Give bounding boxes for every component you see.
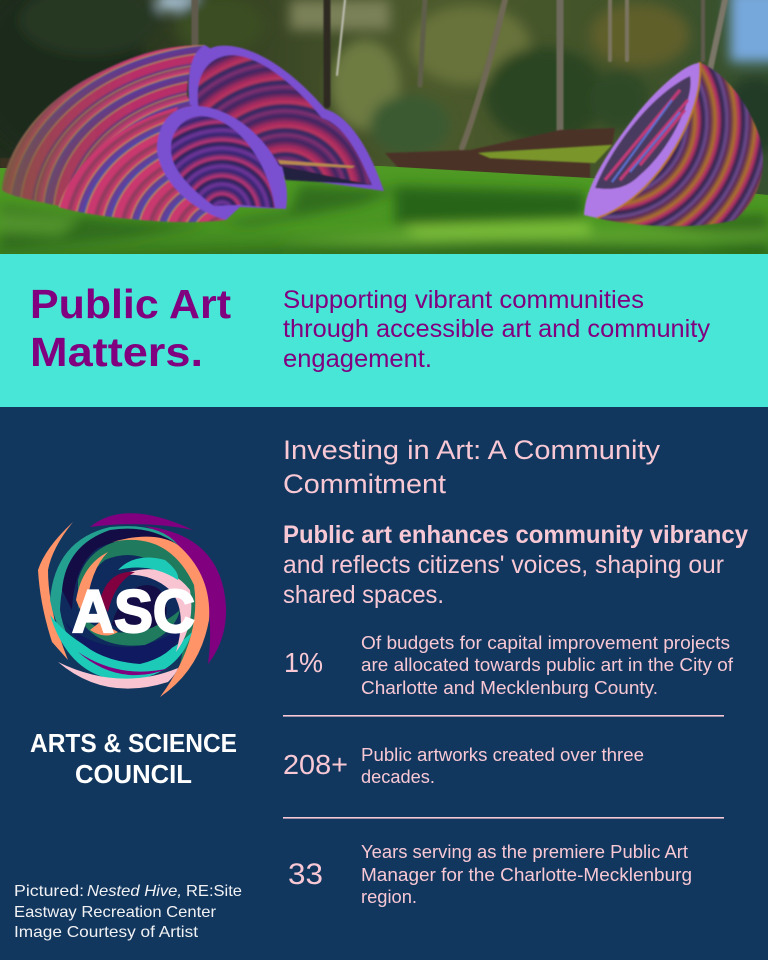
photo credit: Pictured: (14, 883, 84, 900)
stat: 33 (288, 842, 692, 907)
photo credit (14, 883, 242, 941)
photo credit: RE:Site (186, 883, 242, 900)
photo credit: Nested Hive, (87, 883, 182, 900)
sculpture: right bowl (584, 62, 763, 226)
stat: 33: region. (361, 887, 417, 907)
stat: 1%: Of budgets for capital improvement projects (361, 633, 730, 653)
organisation name: ARTS & SCIENCE (30, 728, 237, 758)
intro paragraph: and reflects citizens' voices, shaping our (283, 551, 724, 579)
intro paragraph: shared spaces. (283, 581, 444, 609)
section heading: Commitment (283, 469, 447, 499)
sculpture: large shell (0, 40, 384, 210)
organisation name (30, 728, 237, 789)
stat: 208+: 208+ (283, 749, 348, 780)
section heading: Investing in Art: A Community (283, 435, 661, 465)
tree trunks (195, 0, 725, 148)
title: Public Art (30, 281, 231, 327)
logo: ASC swirl (38, 513, 226, 697)
subtitle (283, 286, 711, 373)
panel: navy content area (0, 407, 768, 960)
stat: 1% (284, 633, 734, 698)
organisation name: COUNCIL (75, 759, 192, 789)
stat: 1%: 1% (284, 647, 323, 678)
stat: 1%: Charlotte and Mecklenburg County. (361, 678, 658, 698)
stat: 208+: Public artworks created over three (361, 745, 644, 765)
intro paragraph (283, 521, 748, 609)
subtitle: engagement. (283, 345, 432, 373)
stat: 1%: are allocated towards public art in the City of (361, 655, 734, 675)
panel: teal title band (0, 254, 768, 407)
stat: 208+: decades. (361, 767, 435, 787)
stat: 33: 33 (288, 858, 323, 891)
stat: 33: Manager for the Charlotte-Mecklenburg (361, 865, 692, 885)
tree foliage (0, 0, 768, 160)
lawn shadows and highlights (0, 185, 768, 256)
ASC lettering: ASC (72, 578, 195, 645)
stat: 208+ (283, 745, 644, 787)
stat: 33: Years serving as the premiere Public Art (361, 842, 688, 862)
photo credit: Eastway Recreation Center (14, 904, 217, 921)
swirl body (38, 513, 226, 697)
photo credit: Image Courtesy of Artist (14, 924, 199, 941)
photo: Nested Hive sculptures on a lawn (0, 0, 768, 256)
sculpture: small shell (58, 106, 287, 222)
lawn (0, 166, 768, 254)
subtitle: Supporting vibrant communities (283, 286, 644, 314)
title: Matters. (30, 329, 203, 375)
intro paragraph: Public art enhances community vibrancy (283, 521, 748, 549)
mulch bed and fence (0, 128, 615, 178)
subtitle: through accessible art and community (283, 315, 711, 343)
section heading (283, 435, 661, 499)
title (30, 281, 231, 375)
